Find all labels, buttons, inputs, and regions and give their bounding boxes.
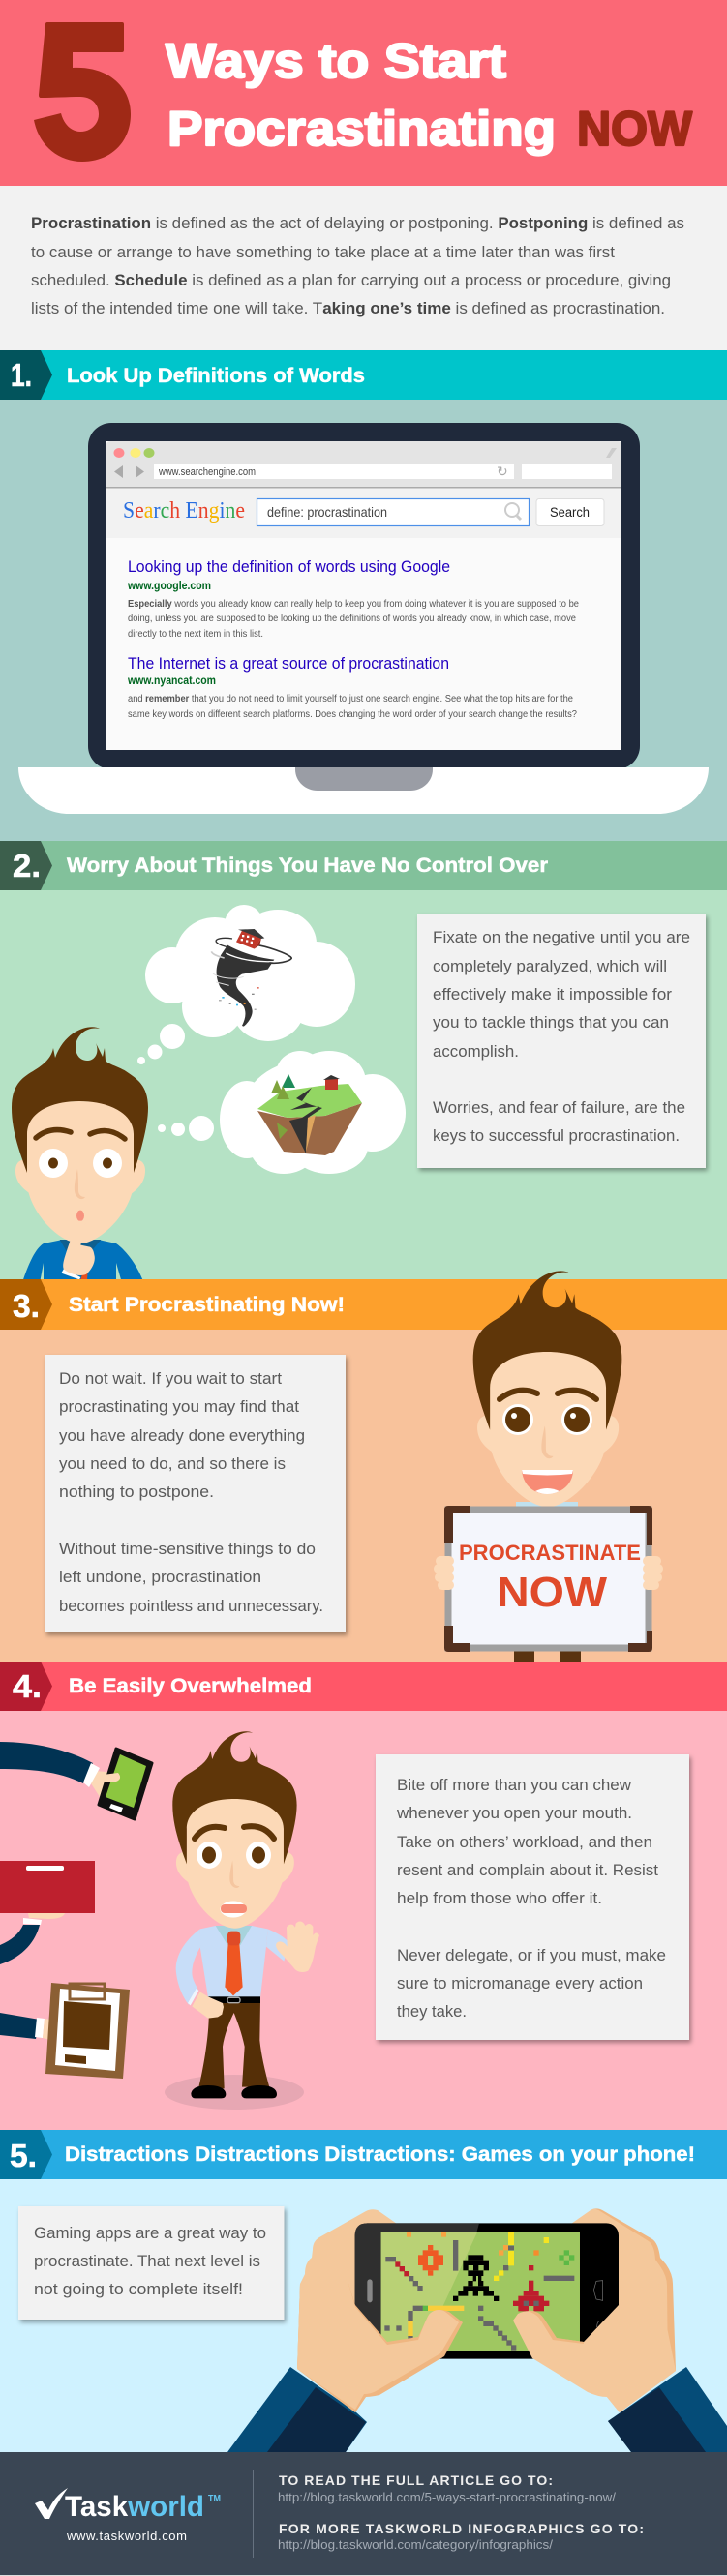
header 4 [0,1662,727,1711]
text card section 2: you to tackle things that you can [433,1013,669,1032]
infographics link: http://blog.taskworld.com/category/infographics/ [278,2538,554,2552]
text card section 2: effectively make it impossible for [433,985,672,1003]
text card section 3: Do not wait. If you wait to start [59,1369,282,1388]
text card section 4: Take on others’ workload, and then [397,1833,652,1851]
collar [216,1926,252,1945]
text card section 4: sure to micromanage every action [397,1974,643,1992]
section 4 background [0,1711,727,2130]
shirt [200,1926,268,1997]
eyes [500,1391,596,1435]
header 3: Start Procrastinating Now! [69,1294,345,1316]
text card section 2 [417,914,706,1168]
section 3 background [0,1330,727,1662]
header 5 [0,2130,727,2179]
section 1 background [0,400,727,842]
search result 1: Looking up the definition of words using Google [128,557,450,576]
footer [0,2452,727,2576]
text card section 2: Fixate on the negative until you are [433,928,690,946]
header 1 [0,350,727,400]
text card section 4: Never delegate, or if you must, make [397,1946,666,1964]
text card section 4: Bite off more than you can chew [397,1776,632,1794]
search result 2: and remember that you do not need to limit yourself to just one search engine. See what the top hits are for the [128,694,573,704]
section 2 background [0,890,727,1279]
text card section 5: procrastinate. That next level is [34,2252,260,2270]
right sleeve [608,2367,727,2452]
search result 1: doing, unless you are supposed to be looking up the definitions of words you already know, in which case, move [128,614,576,624]
hand backs [297,2209,407,2412]
text card section 3: becomes pointless and unnecessary. [59,1597,323,1615]
trousers [198,2001,269,2088]
taskworld logo [35,2488,221,2543]
right thumb and palm [513,2284,676,2412]
arm holding clipboard [0,1983,130,2079]
article link: http://blog.taskworld.com/5-ways-start-procrastinating-now/ [278,2491,617,2504]
big number 5 [34,22,131,162]
article link: TO READ THE FULL ARTICLE GO TO: [279,2472,553,2488]
header 2: Worry About Things You Have No Control Over [67,854,548,877]
intro text block: lists of the intended time one will take. Taking one’s time is defined as procrastination. [31,299,665,317]
laptop base [18,767,709,814]
title line 2: Procrastinating [167,102,556,156]
text card section 5: Gaming apps are a great way to [34,2224,266,2242]
text card section 4: they take. [397,2002,467,2021]
search result 1: www.google.com [127,579,211,592]
browser window: www.searchengine.com [158,466,256,478]
header 3: 3. [13,1288,40,1324]
intro text block: to cause or arrange to have something to take place at a time later than was first [31,243,615,261]
tie [225,1943,243,1995]
text card section 3: procrastinating you may find that [59,1397,299,1416]
sign board: PROCRASTINATE [459,1541,641,1565]
text card section 5 [18,2206,285,2320]
text card section 3: you need to do, and so there is [59,1454,286,1473]
character: overwhelmed man [165,1731,319,2110]
hands on sign [434,1556,663,1590]
search result 1: directly to the next item in this list. [128,629,263,640]
thought cloud: tornado [137,905,355,1064]
infographics link: FOR MORE TASKWORLD INFOGRAPHICS GO TO: [279,2521,644,2536]
text card section 3: you have already done everything [59,1426,305,1445]
text card section 3: Without time-sensitive things to do [59,1540,316,1558]
ground shadow [165,2075,304,2110]
text card section 2: Worries, and fear of failure, are the [433,1098,685,1117]
surprised mouth [221,1901,247,1918]
character: thinking man [12,1027,148,1279]
header 2: 2. [13,848,41,884]
arm holding red folder [0,1861,95,1964]
thought cloud: earthquake island [158,1051,406,1174]
sign board [444,1506,652,1652]
laptop lid [88,423,640,769]
text card section 5: not going to complete itself! [34,2280,243,2298]
title word NOW: NOW [577,102,693,156]
taskworld logo: www.taskworld.com [66,2529,187,2543]
text card section 2: keys to successful procrastination. [433,1126,680,1145]
browser window: Search [550,505,590,520]
search result 2: same key words on different search platforms. Does changing the word order of your search change the results? [128,709,577,720]
text card section 3: left undone, procrastination [59,1568,261,1586]
hero banner [0,0,727,186]
search result 2 [127,654,577,720]
phone [355,2223,619,2359]
header 1: Look Up Definitions of Words [67,365,365,387]
header 2 [0,841,727,890]
header 4: Be Easily Overwhelmed [69,1675,312,1697]
left sleeve [227,2367,367,2452]
search result 2: www.nyancat.com [127,674,216,687]
article link [278,2472,617,2504]
text card section 2: accomplish. [433,1042,519,1061]
character: man holding sign [434,1271,663,1662]
header 5: 5. [10,2138,37,2173]
search box [257,499,529,526]
text card section 3 [45,1355,346,1632]
search button [536,499,604,526]
hands holding phone game [227,2208,727,2452]
search result 1 [127,557,579,640]
hand on hip [192,1992,224,2019]
intro text block [0,186,727,350]
text card section 2: completely paralyzed, which will [433,957,667,975]
eyes [36,1130,125,1178]
divider [253,2470,254,2558]
sign board: NOW [497,1569,607,1616]
laptop with browser [18,423,709,814]
right arm [266,1929,288,1962]
arm holding phone [0,1742,152,1819]
title line 1: Ways to Start [166,34,506,88]
hand with finger on lips [61,1211,95,1279]
taskworld logo: Taskworld [65,2491,204,2523]
browser window: ↻ [497,464,508,479]
header 4: 4. [13,1668,42,1704]
header 3 [0,1279,727,1330]
text card section 4 [376,1754,689,2040]
open mouth [522,1470,573,1494]
text card section 4: help from those who offer it. [397,1889,602,1907]
search result 1: Especially words you already know can really help to keep you from doing whatever it is you are supposed to be [128,599,579,610]
intro text block: Procrastination is defined as the act of delaying or postponing. Postponing is defined as [31,214,684,232]
left thumb and palm [297,2284,463,2412]
text card section 4: whenever you open your mouth. [396,1804,632,1822]
infographics link [278,2521,644,2552]
eyes [195,1826,274,1869]
browser window [106,441,621,750]
search result 2: The Internet is a great source of procrastination [128,654,449,673]
taskworld logo: TM [208,2494,221,2504]
header 5: Distractions Distractions Distractions: Games on your phone! [65,2143,695,2166]
intro text block: scheduled. Schedule is defined as a plan for carrying out a process or procedure, giving [31,271,671,289]
header 1: 1. [11,357,32,393]
shoes [191,2085,226,2098]
game screen [381,2232,580,2351]
text card section 3: nothing to postpone. [59,1483,214,1501]
browser window: define: procrastination [267,504,387,520]
belt [207,1996,260,2003]
text card section 4: resent and complain about it. Resist [397,1861,658,1879]
search engine logo: Search Engine [123,498,245,524]
raised hand [276,1921,319,1972]
section 5 background [0,2179,727,2452]
